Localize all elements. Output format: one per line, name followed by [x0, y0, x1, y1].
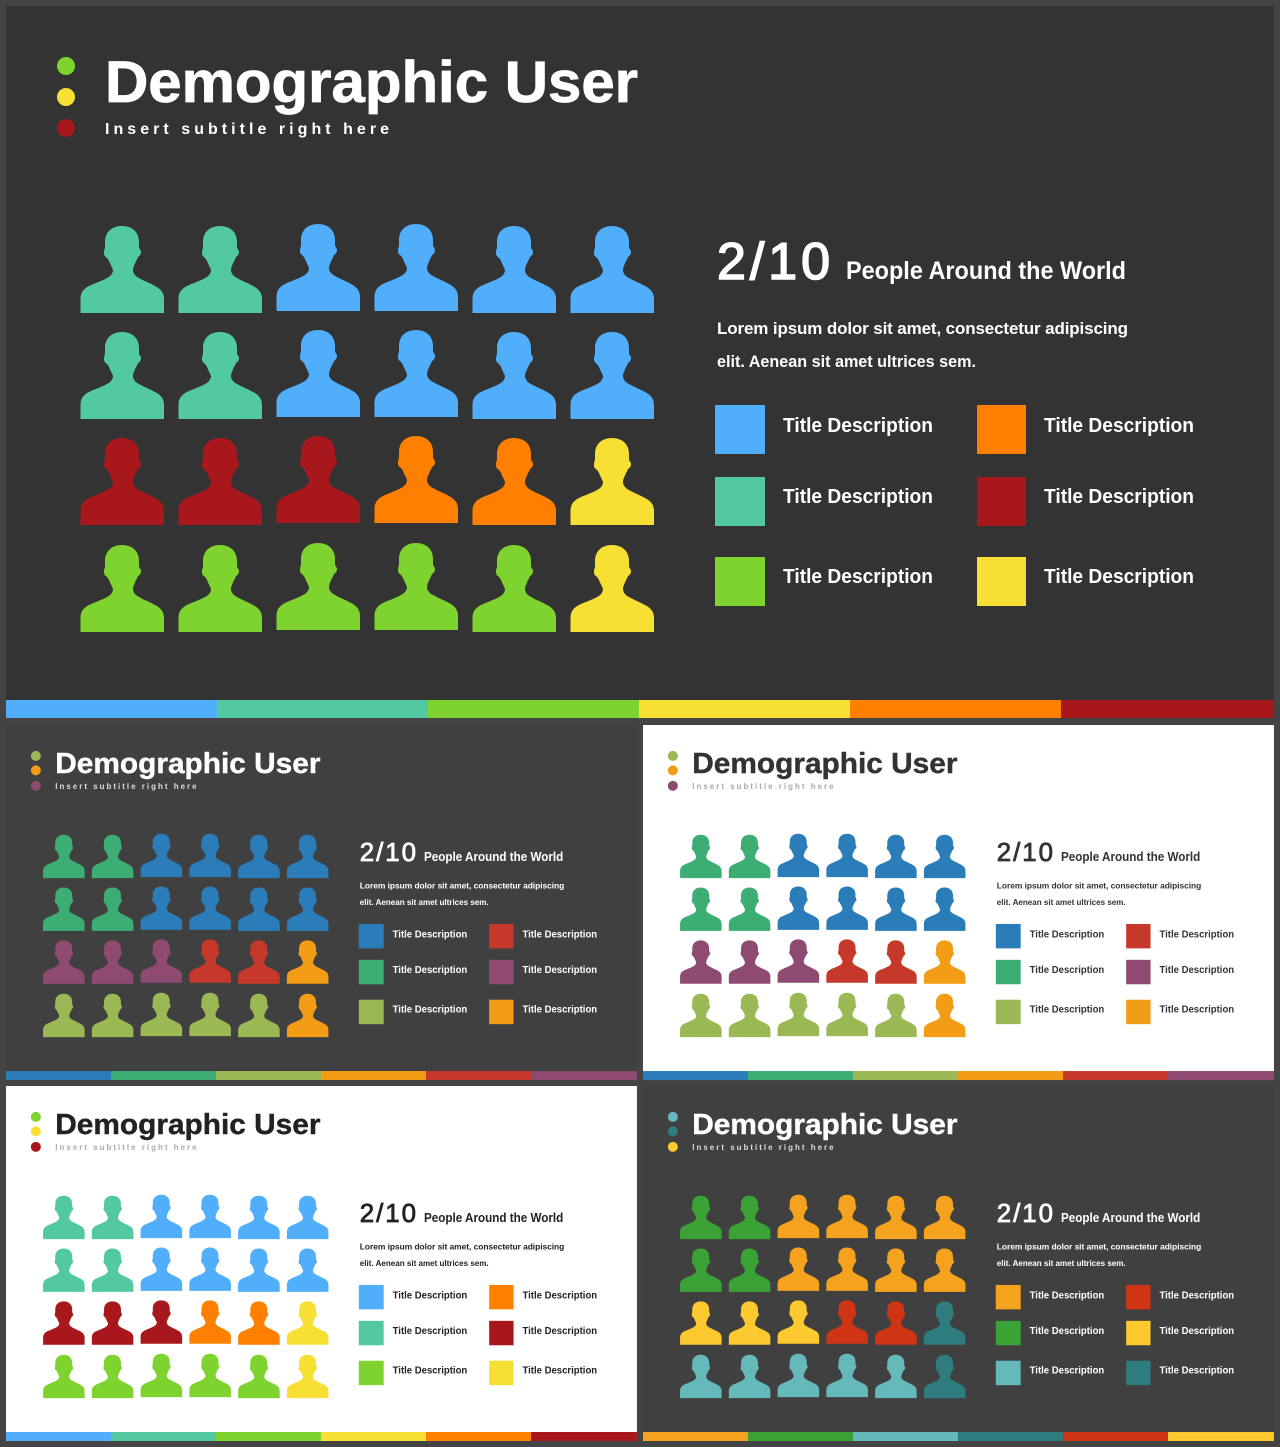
body text: elit. Aenean sit amet ultrices sem. — [360, 1258, 489, 1268]
legend: Title Description — [1160, 965, 1234, 976]
legend: Title Description — [1044, 566, 1194, 588]
title: Demographic User — [105, 50, 638, 115]
legend — [359, 924, 597, 1024]
title: Demographic User — [692, 748, 957, 780]
subtitle: Insert subtitle right here — [692, 1143, 834, 1152]
body text: Lorem ipsum dolor sit amet, consectetur adipiscing — [997, 881, 1201, 891]
legend: Title Description — [1160, 1326, 1234, 1337]
legend: Title Description — [393, 929, 467, 940]
legend: Title Description — [1030, 1326, 1104, 1337]
subtitle: Insert subtitle right here — [55, 782, 197, 791]
body text — [997, 881, 1201, 907]
legend — [996, 1285, 1234, 1385]
panel: small dark slide, warm and teal palette — [643, 1086, 1274, 1441]
statistic heading — [997, 839, 1200, 867]
subtitle: Insert subtitle right here — [692, 782, 834, 791]
title bullets — [57, 57, 75, 137]
pictogram grid — [680, 1195, 965, 1398]
legend — [359, 1285, 597, 1385]
statistic heading: 2/10 — [717, 233, 830, 291]
statistic heading: 2/10 — [997, 1200, 1053, 1228]
pictogram grid — [80, 224, 654, 632]
title bullets — [668, 1112, 678, 1152]
colour strip — [643, 1071, 1274, 1080]
legend: Title Description — [523, 929, 597, 940]
legend: Title Description — [1044, 486, 1194, 508]
body text — [360, 1242, 564, 1268]
body text: elit. Aenean sit amet ultrices sem. — [360, 897, 489, 907]
legend: Title Description — [1160, 1290, 1234, 1301]
legend: Title Description — [393, 1366, 467, 1377]
legend: Title Description — [1030, 965, 1104, 976]
colour strip — [643, 1432, 1274, 1441]
legend: Title Description — [1160, 1366, 1234, 1377]
statistic heading — [360, 839, 563, 867]
body text — [997, 1242, 1201, 1268]
statistic heading: 2/10 — [360, 1200, 416, 1228]
statistic heading: People Around the World — [1061, 1211, 1200, 1225]
legend: Title Description — [523, 1326, 597, 1337]
colour strip — [6, 1432, 637, 1441]
legend: Title Description — [783, 566, 933, 588]
body text: Lorem ipsum dolor sit amet, consectetur adipiscing — [360, 1242, 564, 1252]
statistic heading: People Around the World — [846, 257, 1126, 285]
statistic heading — [997, 1200, 1200, 1228]
legend: Title Description — [523, 965, 597, 976]
legend: Title Description — [523, 1005, 597, 1016]
legend: Title Description — [1030, 1366, 1104, 1377]
legend: Title Description — [783, 486, 933, 508]
pictogram grid — [680, 834, 965, 1037]
title: Demographic User — [55, 1109, 320, 1141]
statistic heading — [717, 233, 1126, 291]
panel: main dark slide — [6, 6, 1274, 718]
legend: Title Description — [523, 1366, 597, 1377]
panel: small dark slide, muted palette — [6, 725, 637, 1080]
statistic heading — [360, 1200, 563, 1228]
panel: small white slide, bright palette — [6, 1086, 637, 1441]
body text: elit. Aenean sit amet ultrices sem. — [997, 1258, 1126, 1268]
body text: elit. Aenean sit amet ultrices sem. — [997, 897, 1126, 907]
statistic heading: People Around the World — [424, 850, 563, 864]
legend: Title Description — [393, 1290, 467, 1301]
legend: Title Description — [393, 1326, 467, 1337]
body text: elit. Aenean sit amet ultrices sem. — [717, 352, 976, 371]
statistic heading: 2/10 — [997, 839, 1053, 867]
legend: Title Description — [1030, 929, 1104, 940]
legend — [715, 405, 1194, 606]
title: Demographic User — [692, 1109, 957, 1141]
legend: Title Description — [523, 1290, 597, 1301]
pictogram grid — [43, 1195, 328, 1398]
body text — [717, 319, 1128, 371]
body text — [360, 881, 564, 907]
legend: Title Description — [1030, 1290, 1104, 1301]
subtitle: Insert subtitle right here — [105, 121, 389, 138]
legend: Title Description — [393, 1005, 467, 1016]
statistic heading: People Around the World — [424, 1211, 563, 1225]
body text: Lorem ipsum dolor sit amet, consectetur adipiscing — [997, 1242, 1201, 1252]
title: Demographic User — [55, 748, 320, 780]
statistic heading: People Around the World — [1061, 850, 1200, 864]
statistic heading: 2/10 — [360, 839, 416, 867]
pictogram grid — [43, 834, 328, 1037]
legend: Title Description — [393, 965, 467, 976]
legend: Title Description — [1044, 415, 1194, 437]
legend: Title Description — [1160, 929, 1234, 940]
subtitle: Insert subtitle right here — [55, 1143, 197, 1152]
colour strip — [6, 1071, 637, 1080]
title bullets — [31, 1112, 41, 1152]
title bullets — [31, 751, 41, 791]
legend: Title Description — [1030, 1005, 1104, 1016]
title bullets — [668, 751, 678, 791]
body text: Lorem ipsum dolor sit amet, consectetur adipiscing — [717, 319, 1128, 338]
legend — [996, 924, 1234, 1024]
legend: Title Description — [1160, 1005, 1234, 1016]
colour strip — [6, 700, 1274, 718]
legend: Title Description — [783, 415, 933, 437]
panel: small white slide, muted palette — [643, 725, 1274, 1080]
body text: Lorem ipsum dolor sit amet, consectetur adipiscing — [360, 881, 564, 891]
